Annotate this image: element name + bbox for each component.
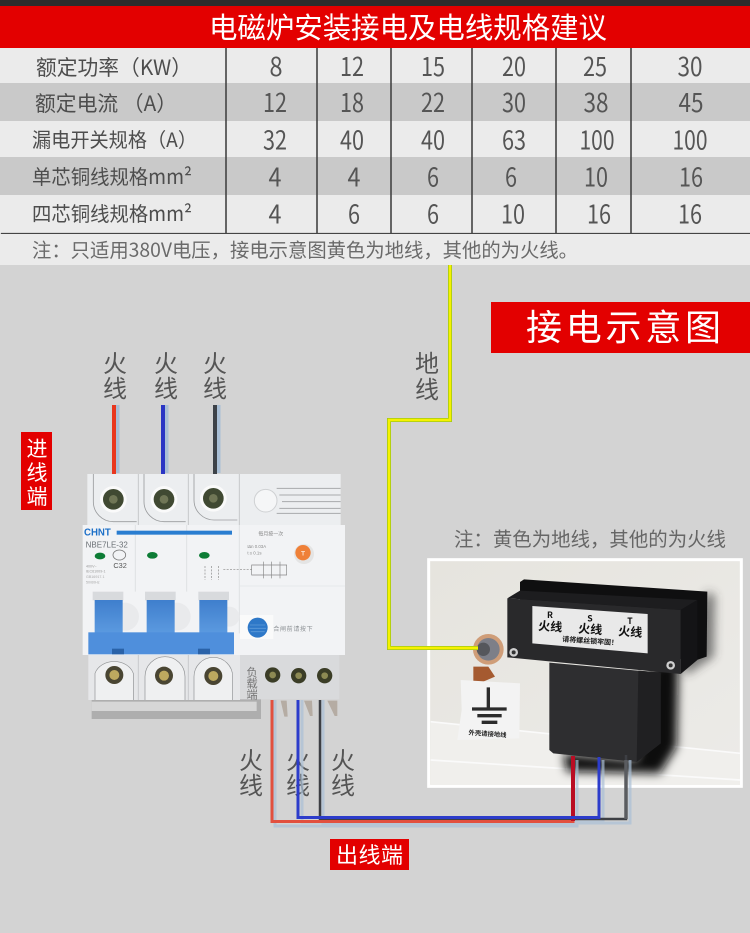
label: ground wire: 地 — [415, 344, 439, 379]
row: leakage switch: 32 — [263, 120, 287, 158]
terminal label — [532, 606, 648, 653]
output prongs — [281, 701, 337, 717]
enclosure shadow — [563, 592, 715, 773]
label: input live wires: 线 — [203, 369, 227, 404]
input wires — [114, 405, 218, 474]
tag: input terminal: 进 — [26, 433, 48, 463]
terminal box: 火线 — [618, 622, 643, 641]
row: single core copper wire: 4 — [348, 158, 360, 194]
row: single core copper wire: 6 — [505, 158, 517, 194]
residual current panel: 每月按一次 — [258, 530, 283, 537]
terminal box: T — [627, 615, 633, 627]
label: input live wires — [103, 344, 227, 404]
row: rated power: 额定功率（KW） — [36, 52, 192, 82]
heading: wiring diagram: 接电示意图 — [526, 299, 721, 351]
tag: input terminal — [21, 432, 52, 511]
tag: input terminal: 线 — [26, 457, 48, 487]
row: leakage switch: 漏电开关规格（A） — [32, 124, 197, 153]
row: rated current: 30 — [502, 83, 526, 120]
label: input live wires: 火 — [103, 344, 127, 379]
label: input live wires: 火 — [154, 344, 178, 379]
label: input live wires: 火 — [203, 344, 227, 379]
row: four core copper wire: 16 — [678, 194, 702, 232]
row: four core copper wire: 6 — [427, 194, 439, 232]
circuit breaker: I∆n 0.03A — [247, 544, 266, 549]
row: four core copper wire: 6 — [348, 194, 360, 232]
row: single core copper wire: 4 — [268, 158, 282, 194]
photo note: 注：黄色为地线，其他的为火线 — [454, 523, 726, 552]
table footnote — [0, 234, 750, 265]
row: rated power: 15 — [421, 47, 445, 84]
breaker base — [92, 698, 261, 719]
output wire labels: 火 — [239, 741, 263, 776]
row: rated current: 18 — [340, 83, 364, 120]
load side text: 负 — [246, 665, 258, 681]
title banner: 电磁炉安装接电及电线规格建议 — [209, 5, 607, 47]
row: rated power — [36, 47, 702, 84]
circuit breaker: NBE7LE-32 — [86, 540, 128, 549]
indicator lights — [95, 553, 105, 559]
row: rated power: 20 — [502, 47, 526, 84]
output wire labels: 线 — [331, 766, 355, 801]
photo frame — [429, 560, 741, 786]
row: rated current — [35, 83, 704, 120]
circuit breaker — [83, 474, 345, 719]
row: four core copper wire: 10 — [501, 194, 525, 232]
terminal box: S — [587, 612, 593, 624]
row: rated power: 25 — [583, 47, 607, 84]
load side text — [246, 665, 258, 703]
circuit breaker: 400V~ — [86, 564, 97, 568]
row: single core copper wire: 10 — [584, 158, 608, 194]
terminal box: 火线 — [578, 620, 603, 638]
row: rated current: 12 — [263, 83, 287, 120]
ground sticker: 外壳请接地线 — [468, 728, 507, 739]
circuit breaker: t ≤ 0.1s — [247, 551, 262, 556]
row: single core copper wire: 16 — [679, 158, 703, 194]
yellow ground wire — [389, 265, 478, 648]
row: four core copper wire: 16 — [587, 194, 611, 232]
output wire labels: 线 — [286, 766, 310, 801]
top dark band — [0, 0, 750, 6]
circuit breaker: GB16917.1 — [86, 575, 104, 579]
lower terminals section — [88, 655, 240, 700]
reset button — [240, 615, 273, 639]
wiring photo — [429, 560, 741, 786]
ground screw — [473, 634, 504, 682]
row: single core copper wire: 单芯铜线规格mm² — [32, 161, 192, 190]
terminal box — [507, 579, 707, 762]
circuit breaker: IEC61009-1 — [86, 570, 106, 574]
row: rated current: 额定电流 （A） — [35, 88, 177, 118]
row: leakage switch: 63 — [502, 120, 526, 158]
row: leakage switch — [32, 120, 708, 158]
row: single core copper wire — [32, 158, 703, 194]
output wire labels: 火 — [286, 741, 310, 776]
label: input live wires: 线 — [103, 369, 127, 404]
circuit breaker: T — [301, 550, 305, 557]
output wires — [272, 700, 630, 826]
label: ground wire — [415, 344, 439, 405]
row: rated current: 22 — [421, 83, 445, 120]
output wire labels — [239, 741, 355, 801]
row: four core copper wire: 4 — [268, 194, 282, 232]
circuit breaker: 合闸前请按下 — [273, 624, 313, 633]
load side text: 载 — [246, 676, 258, 692]
switch levers — [93, 592, 123, 600]
wall ledge — [431, 722, 740, 785]
row: four core copper wire: 四芯铜线规格mm² — [32, 198, 192, 227]
terminal box: R — [547, 609, 553, 621]
top terminals section — [87, 474, 341, 526]
label: ground wire: 线 — [415, 370, 439, 405]
tag: output terminal: 出线端 — [336, 838, 403, 870]
load side text: 端 — [246, 687, 258, 703]
row: leakage switch: 40 — [421, 120, 445, 158]
row: rated power: 30 — [678, 47, 702, 84]
row: single core copper wire: 6 — [427, 158, 439, 194]
brand stripe — [117, 531, 232, 535]
terminal box: 请将螺丝锁牢固！ — [562, 634, 618, 648]
label: input live wires: 线 — [154, 369, 178, 404]
row: leakage switch: 100 — [672, 120, 708, 158]
row: four core copper wire — [32, 194, 702, 232]
table footnote: 注：只适用380V电压，接电示意图黄色为地线，其他的为火线。 — [32, 234, 578, 263]
row: leakage switch: 40 — [340, 120, 364, 158]
circuit breaker: 50/60Hz — [86, 580, 100, 584]
row: rated current: 45 — [678, 83, 704, 120]
terminal box: 火线 — [538, 617, 563, 635]
main body — [83, 525, 345, 655]
circuit breaker: C32 — [113, 561, 127, 570]
row: rated current: 38 — [584, 83, 608, 120]
tag: input terminal: 端 — [26, 481, 48, 511]
output wire labels: 火 — [331, 741, 355, 776]
specification table — [0, 47, 750, 234]
output wire labels: 线 — [239, 766, 263, 801]
row: rated power: 8 — [270, 47, 282, 84]
ground sticker — [457, 680, 520, 740]
title banner — [0, 5, 750, 48]
circuit breaker: CHNT — [84, 527, 111, 538]
row: leakage switch: 100 — [580, 120, 614, 158]
row: rated power: 12 — [340, 47, 364, 84]
